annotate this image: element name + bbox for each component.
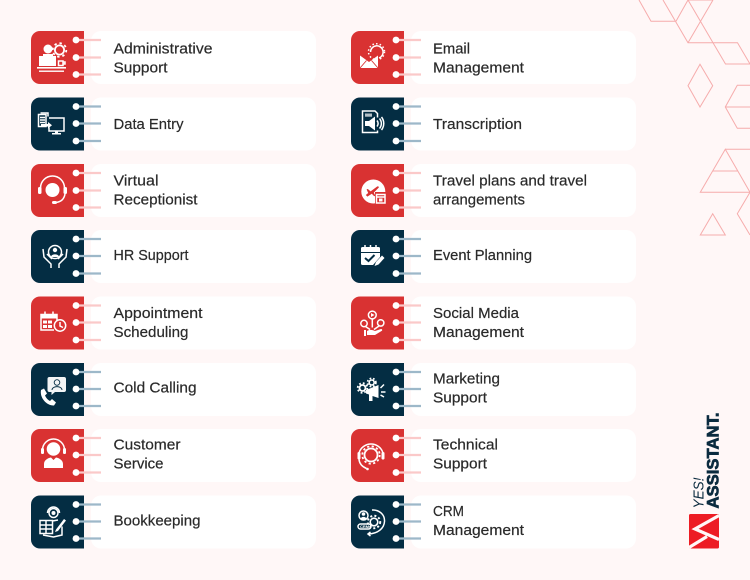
logo mark bbox=[689, 514, 719, 548]
label: Appointment Scheduling: Scheduling bbox=[114, 324, 188, 341]
label: Appointment Scheduling: Appointment bbox=[114, 305, 203, 322]
label: CRM Management: Management bbox=[433, 522, 525, 539]
label: Travel plans and travel arrangements: arrangements bbox=[433, 191, 525, 208]
card: Event Planning bbox=[351, 230, 636, 283]
card: Marketing Support bbox=[351, 363, 636, 416]
icon: HR hands bbox=[43, 246, 67, 268]
icon: hand with social bubbles bbox=[361, 311, 384, 336]
label: Marketing Support: Marketing bbox=[433, 370, 500, 387]
label: Technical Support: Support bbox=[433, 455, 488, 472]
card: Bookkeeping bbox=[31, 496, 316, 548]
icon: gears and megaphone bbox=[358, 378, 386, 401]
icon: data entry bbox=[38, 113, 64, 134]
card: Virtual Receptionist bbox=[31, 164, 316, 217]
label: Transcription: Transcription bbox=[433, 116, 522, 133]
label: Administrative Support: Support bbox=[114, 59, 168, 76]
icon: CRM person and gear bbox=[358, 510, 385, 536]
logo wordmark: ASSISTANT.: ASSISTANT. bbox=[704, 412, 722, 508]
label: Data Entry: Data Entry bbox=[114, 116, 184, 133]
label: Marketing Support: Support bbox=[433, 389, 488, 406]
label: Technical Support: Technical bbox=[433, 436, 498, 453]
label: Social Media Management: Management bbox=[433, 324, 525, 341]
label: HR Support: HR Support bbox=[114, 247, 189, 264]
icon: plane and calendar bbox=[361, 180, 386, 204]
label: Email Management: Management bbox=[433, 59, 525, 76]
card: CRM Management bbox=[351, 496, 636, 548]
label: Cold Calling: Cold Calling bbox=[114, 380, 196, 396]
logo: Yes! Assistant bbox=[689, 412, 722, 548]
icon: headset receptionist bbox=[38, 176, 67, 204]
label: Event Planning: Event Planning bbox=[433, 247, 532, 264]
label: CRM Management: CRM bbox=[433, 503, 464, 520]
icon: calendar with check and pen bbox=[361, 245, 384, 266]
card: Data Entry bbox=[31, 98, 316, 150]
icon: ledger book and coin bbox=[40, 507, 66, 537]
icon: customer service agent bbox=[41, 439, 66, 468]
card: Cold Calling bbox=[31, 363, 316, 416]
icon: CRM person and gear: CRM bbox=[360, 524, 370, 529]
icon: calendar and clock bbox=[41, 312, 66, 331]
icon: gear and headset bbox=[358, 444, 384, 470]
decorative geometric pattern bbox=[639, 0, 750, 235]
card: Travel plans and travel arrangements bbox=[351, 164, 636, 217]
label: Travel plans and travel arrangements: Travel plans and travel bbox=[433, 172, 587, 189]
label: Administrative Support: Administrative bbox=[114, 40, 212, 57]
card: Transcription bbox=[351, 98, 636, 150]
label: Bookkeeping: Bookkeeping bbox=[114, 512, 200, 530]
label: Social Media Management: Social Media bbox=[433, 305, 520, 322]
card: Customer Service bbox=[31, 429, 316, 482]
card: Email Management bbox=[351, 31, 636, 84]
logo wordmark: YES!: YES! bbox=[690, 477, 708, 508]
icon: email envelope and gear bbox=[360, 44, 384, 68]
card: Social Media Management bbox=[351, 296, 636, 350]
card: Technical Support bbox=[351, 429, 636, 482]
label: Virtual Receptionist: Virtual bbox=[114, 172, 158, 189]
card: HR Support bbox=[31, 230, 316, 283]
label: Customer Service: Customer bbox=[114, 436, 180, 453]
label: Customer Service: Service bbox=[114, 455, 164, 472]
card: Administrative Support bbox=[31, 31, 316, 84]
label: Virtual Receptionist: Receptionist bbox=[114, 191, 198, 208]
card: Appointment Scheduling bbox=[31, 296, 316, 350]
label: Email Management: Email bbox=[433, 40, 470, 57]
icon: administrative support bbox=[37, 43, 66, 72]
icon: phone and contact bubble bbox=[41, 377, 66, 406]
icon: audio document bbox=[362, 111, 384, 132]
